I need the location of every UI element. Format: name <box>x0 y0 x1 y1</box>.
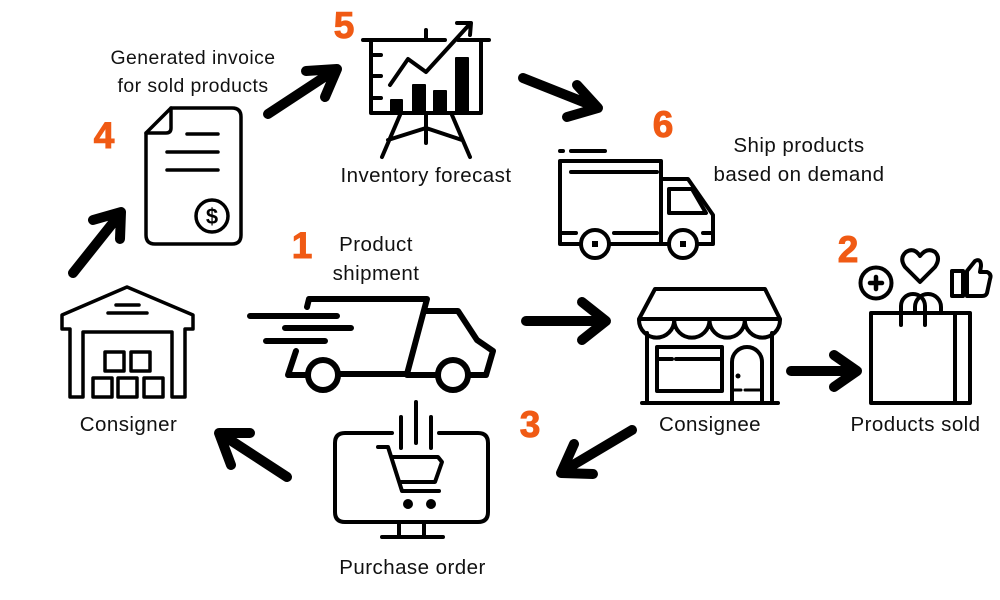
icon: consigner warehouse <box>62 287 193 397</box>
arrow: consignee to purchase order <box>561 430 632 474</box>
number 1: 1 <box>292 225 312 266</box>
arrow: purchase order to consigner <box>219 433 287 477</box>
arrow: consigner to invoice <box>73 212 121 273</box>
arrow: forecast to shipping <box>523 78 598 117</box>
number 3: 3 <box>520 404 540 445</box>
label: products sold: Products sold <box>850 413 981 436</box>
icon: shopping bag with reactions <box>860 250 991 403</box>
icon: inventory forecast chart <box>363 23 489 157</box>
label: purchase order: Purchase order <box>339 556 486 579</box>
label: ship products: Ship products <box>733 134 865 157</box>
arrow: shipment to consignee <box>526 302 606 340</box>
label: product shipment: Product <box>339 233 413 256</box>
arrow: consignee to products sold <box>791 355 857 387</box>
label: ship products <box>714 134 884 186</box>
label: product shipment <box>333 233 419 285</box>
arrow: invoice to forecast <box>268 69 337 114</box>
label: ship products: based on demand <box>714 163 884 186</box>
number 5: 5 <box>334 5 354 46</box>
label: inventory forecast: Inventory forecast <box>340 164 512 187</box>
label: product shipment: shipment <box>333 262 419 285</box>
number 2: 2 <box>838 229 858 270</box>
icon: consignee store <box>639 289 780 403</box>
icon: purchase order monitor with cart <box>335 402 488 537</box>
label: consignee: Consignee <box>659 413 761 436</box>
icon: invoice document <box>146 108 241 244</box>
icon: speeding truck <box>250 299 493 390</box>
label: generated invoice: for sold products <box>118 75 268 97</box>
icon: invoice document: $ <box>206 204 218 229</box>
number 4: 4 <box>94 115 115 156</box>
number 6: 6 <box>653 104 673 145</box>
label: generated invoice <box>110 47 276 97</box>
icon: delivery truck <box>560 151 713 258</box>
label: consigner: Consigner <box>80 413 177 436</box>
label: generated invoice: Generated invoice <box>110 47 276 69</box>
